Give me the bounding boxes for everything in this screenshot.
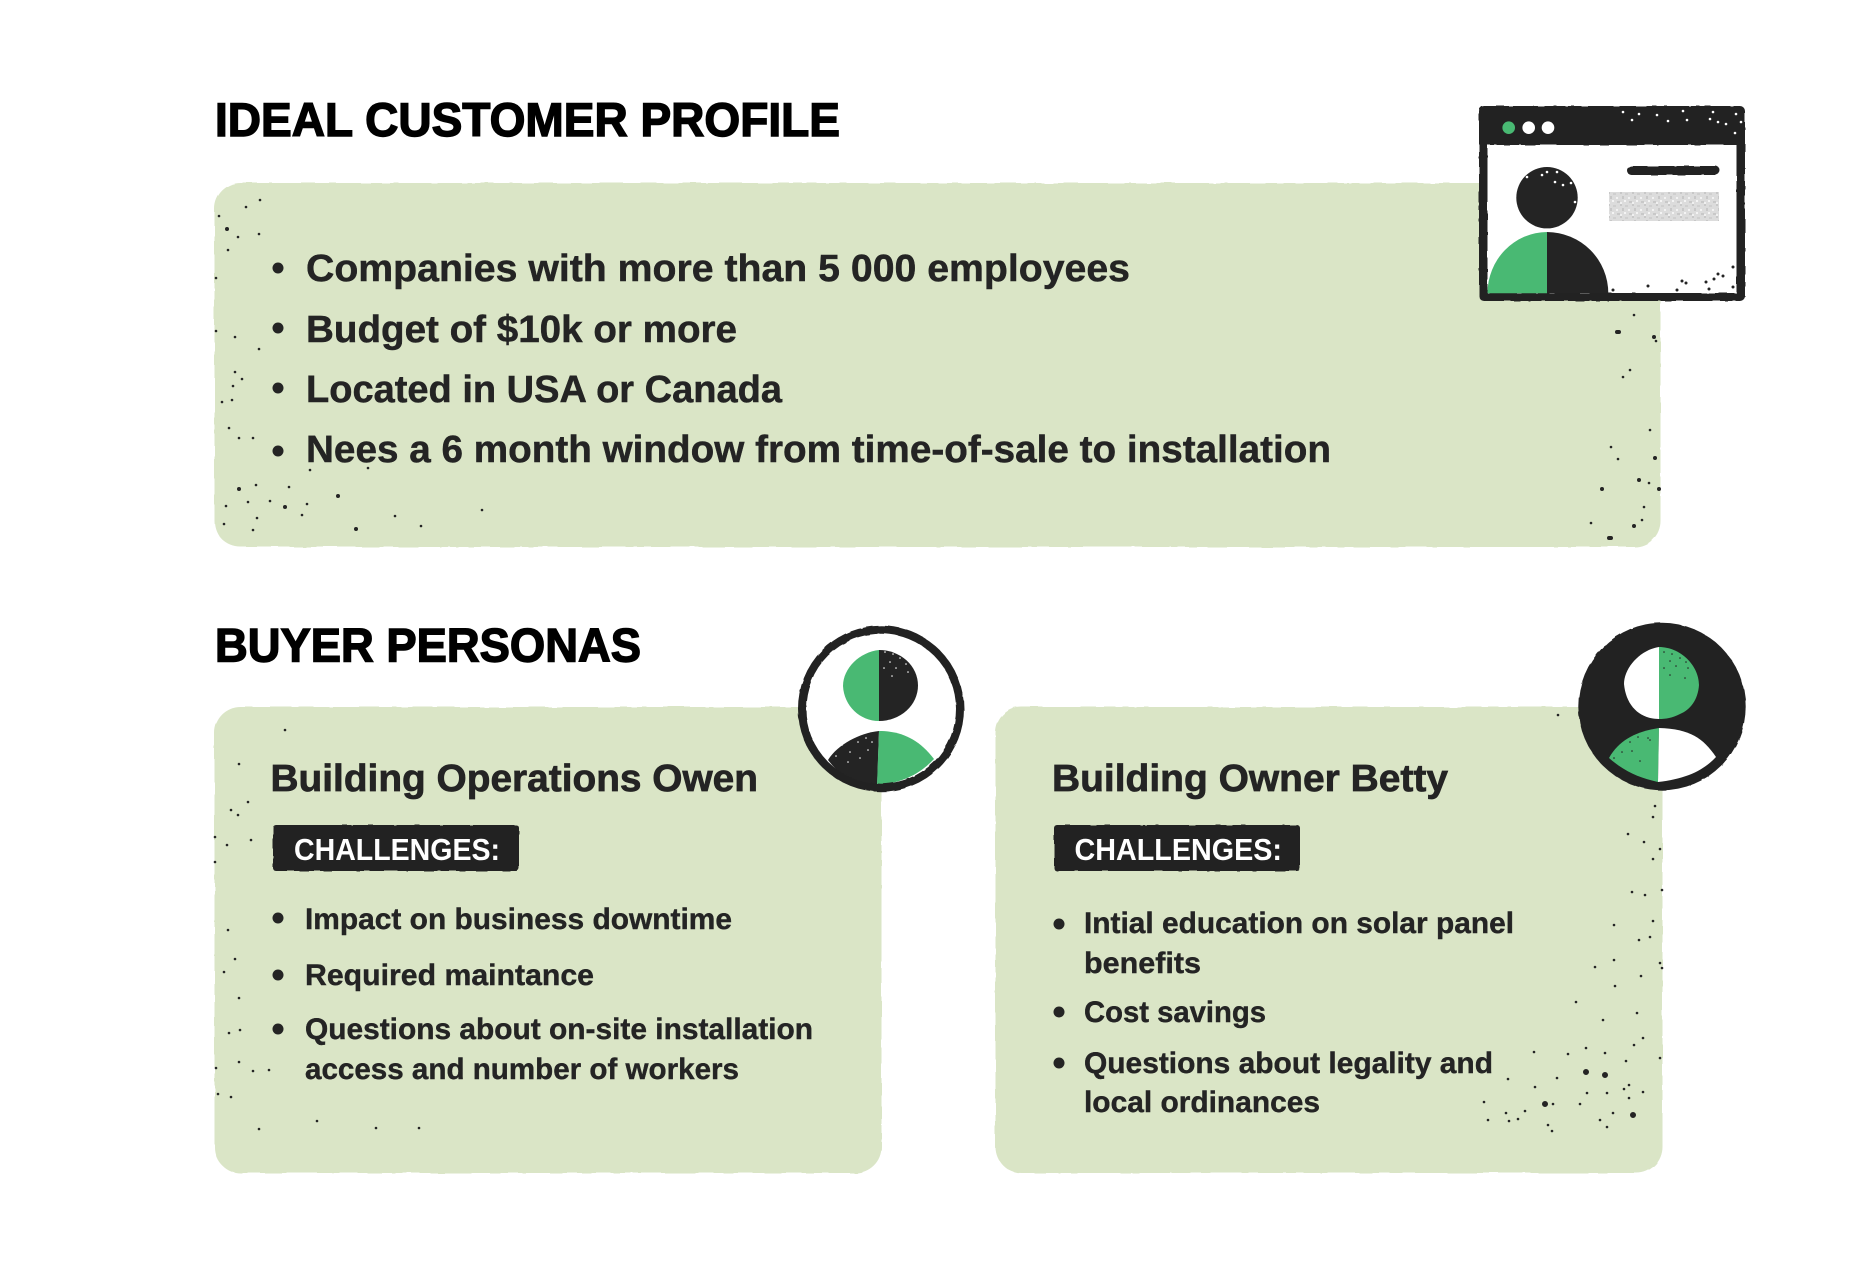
heading: ideal customer profile: IDEAL CUSTOMER PROFILE xyxy=(215,93,840,146)
list: owen challenges: Required maintance xyxy=(305,959,594,992)
list: ideal customer criteria xyxy=(272,248,1331,471)
list: ideal customer criteria: Companies with more than 5 000 employees xyxy=(306,248,1130,290)
tag: challenges xyxy=(1054,825,1300,871)
list: ideal customer criteria: Located in USA or Canada xyxy=(306,369,783,411)
persona name: betty: Building Owner Betty xyxy=(1052,758,1448,800)
icon: owen avatar xyxy=(802,630,960,790)
list: ideal customer criteria: Budget of $10k or more xyxy=(306,309,737,351)
tag: challenges: CHALLENGES: xyxy=(1074,832,1282,867)
panel: building operations owen xyxy=(214,707,882,1173)
panel: building owner betty xyxy=(996,707,1662,1173)
list: owen challenges: Impact on business downtime xyxy=(305,903,732,936)
list: ideal customer criteria: Nees a 6 month window from time-of-sale to installation xyxy=(306,429,1331,471)
persona name: owen: Building Operations Owen xyxy=(270,758,758,800)
list: betty challenges: local ordinances xyxy=(1084,1086,1320,1119)
tag: challenges xyxy=(273,825,519,871)
icon: betty avatar xyxy=(1578,623,1746,790)
icon: browser window with profile xyxy=(1479,106,1745,301)
list: betty challenges: benefits xyxy=(1084,947,1201,980)
list: betty challenges: Cost savings xyxy=(1084,996,1266,1029)
heading: buyer personas: BUYER PERSONAS xyxy=(215,618,641,672)
list: betty challenges xyxy=(1054,907,1514,1119)
panel: ideal customer profile xyxy=(214,183,1660,547)
list: betty challenges: Questions about legality and xyxy=(1084,1047,1493,1080)
list: owen challenges: Questions about on-site installation xyxy=(305,1013,813,1046)
tag: challenges: CHALLENGES: xyxy=(294,832,500,867)
list: owen challenges: access and number of workers xyxy=(305,1053,739,1086)
list: betty challenges: Intial education on solar panel xyxy=(1084,907,1514,940)
list: owen challenges xyxy=(272,903,813,1086)
